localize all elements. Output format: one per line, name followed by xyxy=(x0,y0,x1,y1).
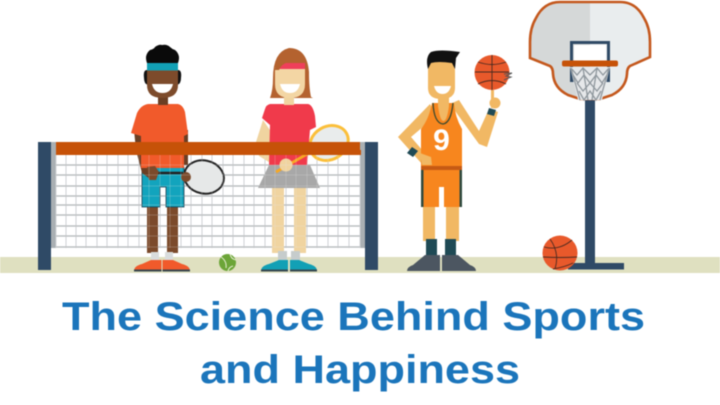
jersey number: 9 xyxy=(433,124,450,157)
socks xyxy=(426,239,437,256)
legs xyxy=(147,205,158,253)
shoes xyxy=(134,260,190,271)
arm left xyxy=(398,104,437,164)
arms xyxy=(134,130,153,179)
wristbands xyxy=(407,108,496,157)
target square xyxy=(572,42,608,80)
ears xyxy=(144,70,181,85)
socks xyxy=(151,252,173,261)
shoes xyxy=(407,255,476,271)
smile xyxy=(280,84,300,93)
ground strip xyxy=(0,257,720,273)
hair xyxy=(427,50,460,69)
face xyxy=(428,62,455,99)
arm right xyxy=(450,100,498,147)
player: tennis man xyxy=(131,45,227,272)
legs xyxy=(423,205,435,241)
face xyxy=(275,67,305,98)
tennis ball xyxy=(219,254,236,271)
title line 2: and Happiness xyxy=(200,348,520,392)
floor basketball xyxy=(542,236,578,270)
shoes xyxy=(261,260,317,271)
headband xyxy=(147,63,178,70)
spinning basketball xyxy=(474,55,512,90)
hair top xyxy=(275,52,286,70)
socks xyxy=(278,251,300,261)
shorts xyxy=(142,167,184,207)
tennis net back xyxy=(51,150,365,248)
pole base xyxy=(568,263,624,270)
headband xyxy=(278,63,305,69)
basketball hoop xyxy=(530,2,650,270)
player: basketball man xyxy=(398,50,500,271)
yellow racket handle xyxy=(276,150,314,172)
neck xyxy=(284,96,294,105)
arms xyxy=(256,120,283,167)
shirt xyxy=(262,104,316,165)
net overlay and top band xyxy=(38,142,378,270)
hair back xyxy=(270,48,313,98)
hand xyxy=(280,158,292,172)
hair xyxy=(146,45,179,63)
rim xyxy=(562,60,618,66)
jersey xyxy=(421,103,462,166)
skirt xyxy=(258,165,320,188)
hand on hip xyxy=(420,153,432,165)
face xyxy=(147,68,178,98)
smile xyxy=(152,84,173,93)
title xyxy=(62,295,645,392)
shorts xyxy=(421,168,462,207)
finger xyxy=(491,90,494,108)
neck xyxy=(158,96,168,105)
neck xyxy=(438,96,449,121)
yellow racket head xyxy=(303,119,355,167)
legs xyxy=(272,187,284,253)
shirt xyxy=(131,104,188,168)
player: tennis woman xyxy=(256,48,355,272)
pole xyxy=(585,98,595,266)
smile xyxy=(434,86,451,94)
title line 1: The Science Behind Sports xyxy=(62,295,645,339)
backboard xyxy=(530,2,650,99)
black racket xyxy=(181,157,227,197)
net xyxy=(570,67,610,100)
